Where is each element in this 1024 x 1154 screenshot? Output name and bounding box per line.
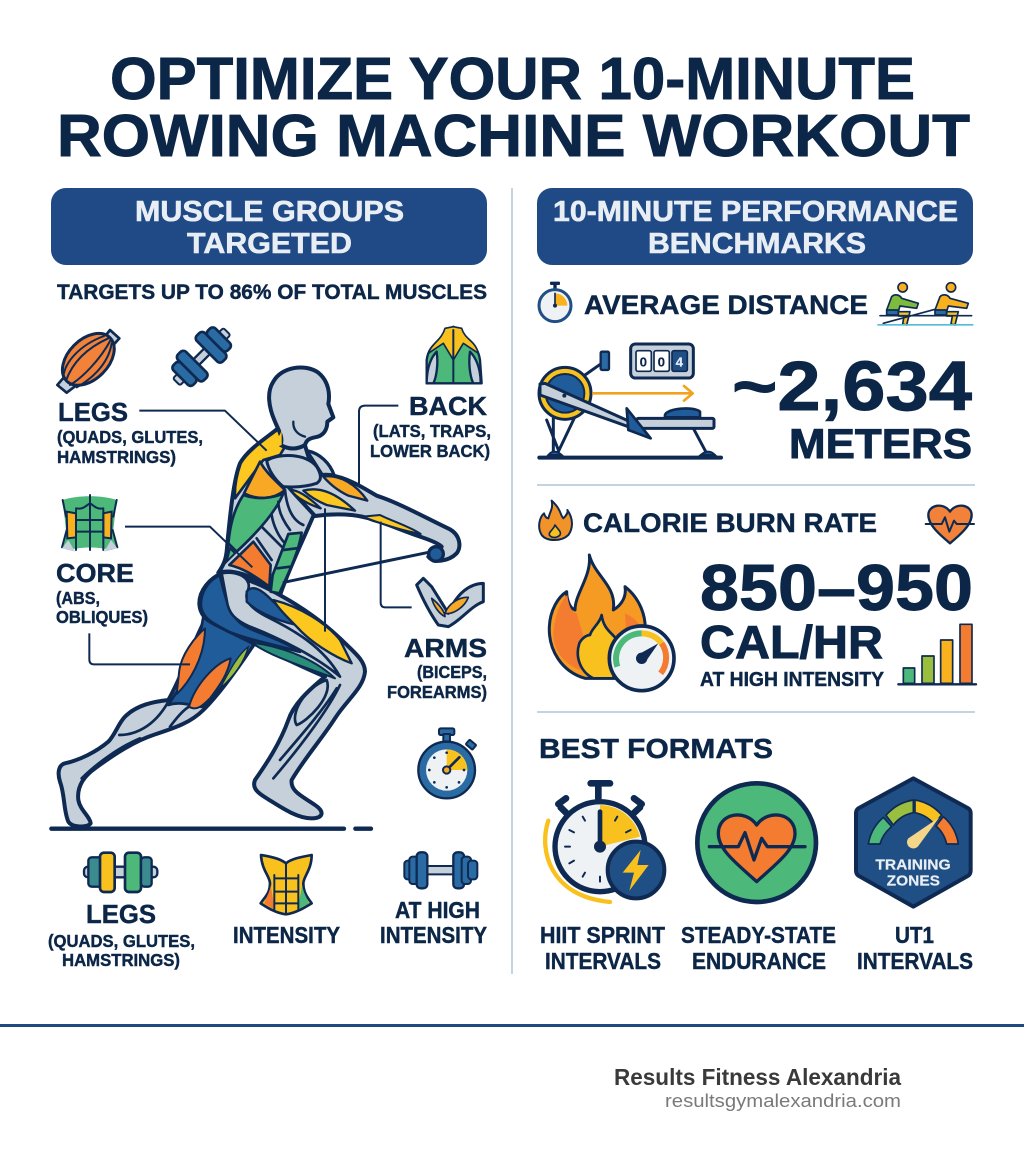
icon: stopwatch <box>418 728 476 798</box>
stat: calorie burn rate: CAL/HR <box>700 616 883 668</box>
panel: muscle figure and labels <box>51 318 483 829</box>
panel: average distance and calorie icons <box>539 282 976 691</box>
bottom label: at high intensity: INTENSITY <box>380 922 487 948</box>
bottom label: intensity: INTENSITY <box>233 922 340 948</box>
hamstring blue <box>168 617 253 707</box>
ground line <box>51 822 371 835</box>
oblique orange <box>229 542 271 587</box>
label: legs: (QUADS, GLUTES, <box>57 427 203 447</box>
head <box>269 367 333 449</box>
icon: big flame with gauge <box>549 555 674 691</box>
front leg <box>199 573 365 818</box>
label: UT1 intervals: INTERVALS <box>857 948 973 974</box>
label: steady-state endurance: STEADY-STATE <box>681 922 836 948</box>
icon: dumbbell diagonal <box>163 318 240 395</box>
icon: training zones badge: ZONES <box>887 874 940 890</box>
label: arms: FOREARMS) <box>387 682 487 702</box>
label: arms: (BICEPS, <box>417 662 487 682</box>
shoulder orange <box>244 462 285 498</box>
torso <box>218 427 317 593</box>
icon: rowing machine: 4 <box>676 355 684 370</box>
icon: flexed arm <box>417 578 483 627</box>
rope to handle <box>284 552 432 582</box>
icon: heart with pulse <box>926 506 974 543</box>
label: back: BACK <box>409 391 487 421</box>
ribs <box>257 490 303 560</box>
label: steady-state endurance: ENDURANCE <box>692 948 826 974</box>
label: arms <box>387 633 487 702</box>
stat: average distance: ~2,634 <box>732 347 972 425</box>
panel heading: benchmarks <box>537 188 973 265</box>
label: core: (ABS, <box>56 588 100 608</box>
label: steady-state endurance <box>681 922 836 974</box>
label: UT1 intervals: UT1 <box>895 922 934 948</box>
bottom row: left icons <box>84 852 477 914</box>
label: HIIT sprint intervals: HIIT SPRINT <box>540 922 666 948</box>
bottom label: legs: HAMSTRINGS) <box>62 950 180 970</box>
footer credit: resultsgymalexandria.com <box>665 1090 901 1111</box>
stat: calorie burn rate <box>583 508 973 691</box>
icon: two rowers <box>877 283 973 326</box>
stat: average distance <box>584 290 972 467</box>
icon: HIIT stopwatch <box>545 783 664 902</box>
hip gray <box>222 573 340 677</box>
back leg <box>59 623 253 827</box>
bottom label: legs: LEGS <box>86 899 156 929</box>
icon: rowing machine: 0 <box>658 355 665 370</box>
title: ROWING MACHINE WORKOUT <box>57 103 970 169</box>
label: core: CORE <box>56 558 134 588</box>
icon: small flame <box>539 501 572 540</box>
footer credit: Results Fitness Alexandria <box>614 1064 901 1090</box>
bottom label: at high intensity <box>380 897 487 948</box>
icon: training zones badge <box>856 778 971 907</box>
label: legs <box>57 397 203 467</box>
stat: calorie burn rate: CALORIE BURN RATE <box>583 508 877 538</box>
label: back <box>370 391 491 461</box>
subheading: targets: TARGETS UP TO 86% OF TOTAL MUSCLES <box>57 281 487 304</box>
stat: average distance: AVERAGE DISTANCE <box>584 290 868 320</box>
label: arms: ARMS <box>404 633 487 663</box>
panel heading: muscle groups: TARGETED <box>187 228 352 260</box>
rear shoulder <box>307 451 334 477</box>
footer credit <box>614 1064 901 1111</box>
glute blue <box>201 575 300 652</box>
icon: muscle <box>53 324 124 395</box>
icon: torso abs <box>261 855 312 914</box>
arm <box>288 475 459 561</box>
trapezius <box>235 428 285 498</box>
icon: rowing machine <box>539 344 721 458</box>
panel heading: muscle groups: MUSCLE GROUPS <box>135 196 404 228</box>
callout lines <box>89 406 412 664</box>
icon: back muscles <box>427 327 482 383</box>
icon: blue dumbbell <box>404 852 477 888</box>
lat green <box>228 493 283 552</box>
stat: calorie burn rate: 850–950 <box>700 551 973 624</box>
panel heading: benchmarks: BENCHMARKS <box>648 228 866 260</box>
icon: colored dumbbell <box>84 853 157 892</box>
label: back: (LATS, TRAPS, <box>373 421 491 441</box>
bottom label: legs <box>48 899 195 970</box>
panel heading: muscle groups <box>51 188 487 265</box>
icon: heart circle <box>697 783 816 902</box>
orange calf hamstrings <box>177 628 205 694</box>
label: legs: LEGS <box>58 397 128 427</box>
icon: bar chart <box>898 624 976 684</box>
abs green <box>271 533 302 593</box>
stat: average distance: METERS <box>789 420 972 467</box>
icon: small stopwatch <box>539 282 571 322</box>
best format icons <box>545 778 971 907</box>
label: legs: HAMSTRINGS) <box>57 447 176 467</box>
label: core <box>56 558 148 627</box>
icon: rowing machine: 0 <box>640 355 647 370</box>
label: core: OBLIQUES) <box>56 607 148 627</box>
label: UT1 intervals <box>857 922 973 974</box>
bottom label: legs: (QUADS, GLUTES, <box>48 931 195 951</box>
heading: best formats: BEST FORMATS <box>539 733 773 764</box>
bottom label: at high intensity: AT HIGH <box>395 897 480 923</box>
icon: training zones badge: TRAINING <box>875 857 951 873</box>
human figure <box>59 367 459 827</box>
deltoid <box>267 455 320 487</box>
title: OPTIMIZE YOUR 10-MINUTE <box>110 46 915 112</box>
label: HIIT sprint intervals: INTERVALS <box>545 948 661 974</box>
icon: core <box>62 495 117 552</box>
label: back: LOWER BACK) <box>370 441 490 461</box>
label: HIIT sprint intervals <box>540 922 666 974</box>
stat: calorie burn rate: AT HIGH INTENSITY <box>700 669 885 691</box>
panel heading: benchmarks: 10-MINUTE PERFORMANCE <box>553 196 958 228</box>
title <box>57 46 970 169</box>
